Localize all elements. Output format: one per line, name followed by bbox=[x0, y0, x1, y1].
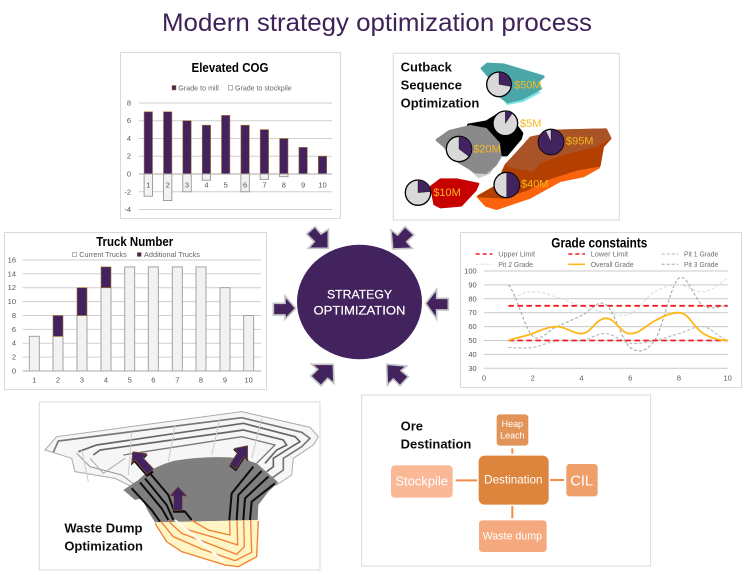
connectors bbox=[456, 448, 564, 518]
heading: Elevated COG: Elevated COG bbox=[192, 60, 268, 75]
pie: $5M bbox=[493, 111, 518, 136]
axis labels: grade constaints: 60 bbox=[468, 322, 477, 331]
axis labels: Elevated COG bbox=[124, 98, 327, 214]
axis labels: truck number: 16 bbox=[8, 256, 16, 264]
heading: cutback sequence optimization bbox=[401, 60, 479, 110]
legend: grade constaints bbox=[476, 250, 718, 269]
axis labels: truck number: 4 bbox=[12, 339, 16, 348]
axis labels: Elevated COG: 10 bbox=[318, 180, 327, 190]
axis labels: truck number: 8 bbox=[199, 376, 203, 384]
value labels: pits: $20M bbox=[473, 143, 501, 155]
pit: black bbox=[468, 113, 522, 155]
pit: orange bbox=[478, 128, 612, 209]
axis labels: grade constaints: 90 bbox=[468, 280, 477, 289]
central circle: strategy optimization bbox=[297, 245, 422, 359]
arrow: from truck number bbox=[273, 296, 296, 319]
bars: current trucks bbox=[29, 267, 254, 371]
axis labels: Elevated COG: 3 bbox=[185, 180, 189, 190]
arrow: dump up-left bbox=[131, 452, 154, 477]
central circle: strategy optimization: STRATEGY bbox=[327, 287, 392, 301]
axis labels: truck number: 6 bbox=[12, 325, 16, 334]
heading: waste dump optimization: Waste Dump bbox=[64, 520, 143, 535]
axis labels: Elevated COG: 4 bbox=[127, 134, 131, 143]
arrow: from ore destination bbox=[387, 364, 408, 386]
pie: $20M bbox=[446, 136, 472, 162]
axis labels: truck number: 6 bbox=[151, 376, 155, 384]
legend: truck number: Current Trucks bbox=[79, 250, 127, 259]
axis labels: truck number: 14 bbox=[8, 269, 16, 278]
axis labels: grade constaints: 70 bbox=[468, 308, 477, 317]
axis labels: grade constaints: 0 bbox=[482, 374, 486, 382]
node: stockpile: Stockpile bbox=[395, 474, 448, 489]
node: destination: Destination bbox=[484, 474, 542, 487]
node: stockpile bbox=[391, 465, 453, 498]
value labels: pits: $5M bbox=[520, 118, 541, 130]
axis labels: truck number: 2 bbox=[56, 376, 60, 384]
axis labels: grade constaints: 2 bbox=[531, 374, 535, 382]
axis labels: grade constaints: 6 bbox=[628, 374, 632, 382]
pie: $50M bbox=[487, 72, 511, 97]
heading: truck number: Truck Number bbox=[96, 234, 173, 249]
axis labels: Elevated COG: -2 bbox=[124, 187, 131, 196]
heading: waste dump optimization: Optimization bbox=[64, 538, 143, 553]
arrow: from grade constaints bbox=[426, 289, 448, 319]
heading: ore destination: Destination bbox=[401, 437, 471, 452]
panel: ore destination bbox=[362, 395, 651, 566]
pit: gray bbox=[437, 126, 500, 178]
legend: Elevated COG bbox=[172, 84, 292, 92]
panel: cutback sequence optimization bbox=[393, 53, 619, 220]
line: lower limit bbox=[508, 340, 728, 342]
axis labels: Elevated COG: 7 bbox=[262, 180, 266, 190]
axis labels: Elevated COG: 2 bbox=[166, 180, 170, 190]
node: heap leach: Leach bbox=[500, 430, 525, 440]
axis labels: grade constaints bbox=[464, 266, 732, 382]
axis labels: Elevated COG: 5 bbox=[224, 180, 228, 190]
value labels: pits: $50M bbox=[514, 79, 541, 91]
legend: grade constaints: Pit 2 Grade bbox=[498, 260, 533, 269]
legend: truck number bbox=[72, 250, 200, 259]
axis labels: truck number: 12 bbox=[8, 283, 16, 292]
heading: ore destination bbox=[401, 418, 471, 452]
axis labels: truck number: 7 bbox=[175, 376, 179, 384]
axis labels: Elevated COG: 6 bbox=[243, 180, 247, 190]
line: overall grade bbox=[508, 313, 728, 340]
axis labels: truck number: 0 bbox=[12, 366, 16, 376]
heading: waste dump optimization bbox=[64, 520, 143, 553]
value labels: pits: $10M bbox=[433, 187, 461, 199]
arrows: pointing to centre bbox=[273, 227, 448, 386]
node: destination bbox=[479, 456, 549, 505]
node: CIL: CIL bbox=[570, 473, 593, 489]
legend: grade constaints: Upper Limit bbox=[498, 250, 536, 258]
axis labels: Elevated COG: 9 bbox=[301, 180, 305, 190]
axis labels: Elevated COG: 8 bbox=[282, 180, 286, 190]
panel: truck number chart bbox=[4, 232, 266, 390]
pie: $40M bbox=[494, 172, 519, 198]
axis labels: grade constaints: 30 bbox=[468, 364, 477, 373]
bars: grade to stockpile bbox=[144, 174, 288, 201]
axis labels: grade constaints: 80 bbox=[468, 294, 477, 303]
axis labels: truck number: 10 bbox=[245, 376, 253, 384]
heading: cutback sequence optimization: Sequence bbox=[401, 78, 462, 93]
axis labels: grade constaints: 10 bbox=[724, 374, 732, 382]
legend: Elevated COG: Grade to stockpile bbox=[235, 84, 292, 92]
value labels: pits: $40M bbox=[521, 178, 548, 190]
arrow: dump up bbox=[170, 487, 187, 513]
line: pit 2 grade bbox=[508, 278, 728, 315]
line: upper limit bbox=[508, 305, 728, 307]
arrow: from cutback sequence bbox=[391, 227, 414, 249]
legend: grade constaints: Pit 1 Grade bbox=[684, 250, 718, 258]
arrow: from elevated COG bbox=[307, 227, 328, 248]
central circle: strategy optimization: OPTIMIZATION bbox=[314, 303, 406, 317]
pie: $10M bbox=[405, 180, 431, 205]
axis labels: Elevated COG: 8 bbox=[127, 98, 131, 108]
pie: $95M bbox=[538, 129, 564, 155]
panel: grade constraints chart bbox=[460, 232, 742, 388]
line: pit 1 grade bbox=[508, 326, 728, 348]
axis labels: grade constaints: 40 bbox=[468, 350, 477, 359]
axis labels: truck number: 5 bbox=[128, 376, 132, 384]
axis labels: Elevated COG: 6 bbox=[127, 116, 131, 125]
axis labels: truck number: 3 bbox=[80, 376, 84, 384]
pit: red bbox=[431, 180, 478, 207]
axis labels: truck number bbox=[8, 256, 253, 384]
heading: grade constaints: Grade constaints bbox=[551, 234, 647, 250]
arrow: dump up-right bbox=[229, 446, 248, 471]
dump: black contour lines bbox=[132, 467, 275, 522]
line: pit 3 grade bbox=[508, 277, 728, 351]
legend: truck number: Additional Trucks bbox=[144, 250, 200, 259]
axis labels: Elevated COG: -4 bbox=[124, 205, 131, 214]
axis labels: truck number: 2 bbox=[12, 353, 16, 362]
dump: upper terraces bbox=[45, 412, 318, 488]
axis labels: grade constaints: 8 bbox=[677, 374, 681, 382]
arrow: from waste dump bbox=[311, 364, 334, 386]
axis labels: Elevated COG: 0 bbox=[127, 170, 131, 178]
axis labels: Elevated COG: 4 bbox=[204, 180, 208, 190]
value labels: pits bbox=[433, 79, 593, 199]
axis labels: truck number: 1 bbox=[32, 376, 36, 384]
axis labels: Elevated COG: 2 bbox=[127, 152, 131, 161]
axis labels: truck number: 9 bbox=[223, 376, 227, 384]
node: waste dump: Waste dump bbox=[483, 531, 542, 543]
legend: grade constaints: Overall Grade bbox=[591, 260, 634, 269]
node: heap leach: Heap bbox=[502, 419, 523, 429]
value labels: pits: $95M bbox=[566, 135, 593, 147]
axis labels: Elevated COG: 1 bbox=[146, 180, 150, 190]
node: waste dump bbox=[479, 520, 547, 552]
bars: additional trucks bbox=[53, 267, 111, 336]
bars: grade to mill bbox=[144, 112, 327, 174]
axis labels: truck number: 4 bbox=[104, 376, 108, 384]
legend: grade constaints: Pit 3 Grade bbox=[684, 260, 718, 269]
axis labels: truck number: 10 bbox=[8, 297, 16, 306]
heading: ore destination: Ore bbox=[401, 418, 423, 433]
axis labels: grade constaints: 4 bbox=[579, 374, 584, 382]
legend: grade constaints: Lower Limit bbox=[591, 250, 629, 258]
legend: Elevated COG: Grade to mill bbox=[178, 84, 219, 92]
node: CIL bbox=[566, 464, 598, 496]
title: Modern strategy optimization process bbox=[162, 9, 592, 37]
panel: waste dump optimization bbox=[39, 402, 320, 570]
dump: gray excavation bbox=[123, 457, 278, 522]
axis labels: grade constaints: 100 bbox=[464, 266, 477, 276]
axis labels: truck number: 8 bbox=[12, 311, 16, 320]
axis labels: grade constaints: 50 bbox=[468, 336, 477, 345]
heading: cutback sequence optimization: Optimization bbox=[401, 95, 479, 110]
dump: yellow lower section bbox=[155, 520, 258, 567]
panel: elevated COG chart bbox=[120, 52, 340, 218]
pit: teal bbox=[482, 64, 543, 105]
node: heap leach bbox=[497, 414, 528, 446]
heading: cutback sequence optimization: Cutback bbox=[401, 60, 453, 75]
